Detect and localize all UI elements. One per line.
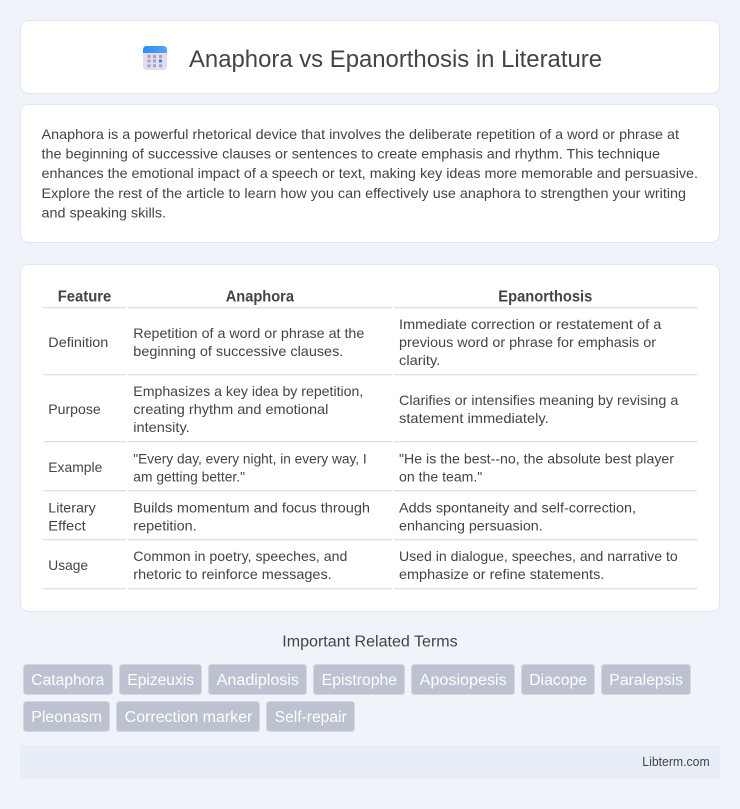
tag: Epistrophe [314, 664, 404, 694]
icon: calendar [143, 46, 167, 70]
heading: related terms: Important Related Terms [282, 634, 458, 651]
footer credit: Libterm.com [642, 755, 710, 769]
row: purpose: creating rhythm and emotional [133, 401, 328, 417]
tag: Cataphora: Cataphora [31, 672, 105, 689]
row: definition: Repetition of a word or phrase at the [133, 325, 365, 341]
tag: Diacope [522, 664, 594, 694]
tag: Aposiopesis: Aposiopesis [420, 672, 507, 689]
tag: Self-repair: Self-repair [275, 709, 347, 726]
row: purpose: Purpose [48, 401, 101, 417]
row: example: "He is the best--no, the absolute best player [399, 450, 674, 466]
table header row [58, 289, 592, 306]
tag: Diacope: Diacope [529, 672, 587, 689]
row: example: Example [48, 459, 103, 475]
tag: Epizeuxis [120, 664, 202, 694]
intro text: Anaphora is a powerful rhetorical device that involves the deliberate repetition of a word or phrase at [42, 126, 679, 142]
intro text [42, 126, 698, 220]
tag: Epizeuxis: Epizeuxis [127, 672, 194, 689]
row: literary effect: enhancing persuasion. [399, 517, 543, 533]
row: example: "Every day, every night, in every way, I [133, 450, 367, 466]
table header row: Anaphora [226, 289, 294, 306]
row: purpose: Emphasizes a key idea by repetition, [133, 383, 363, 399]
row: definition: Immediate correction or restatement of a [399, 316, 662, 332]
title: Anaphora vs Epanorthosis in Literature [189, 46, 602, 73]
table header row: Feature [58, 289, 112, 306]
tag: Aposiopesis [412, 664, 514, 694]
row: purpose: Clarifies or intensifies meaning by revising a [399, 392, 679, 408]
row: literary effect: Effect [48, 517, 86, 533]
row: literary effect: Adds spontaneity and self-correction, [399, 499, 636, 515]
row: definition [48, 316, 662, 368]
tag: Epistrophe: Epistrophe [322, 672, 397, 689]
row: definition: Definition [48, 334, 108, 350]
row: literary effect: Builds momentum and focus through [133, 499, 370, 515]
intro text: the beginning of successive clauses or sentences to create emphasis and rhythm. This technique [42, 146, 660, 162]
row: example: on the team." [399, 468, 482, 484]
intro text: and speaking skills. [42, 204, 166, 220]
intro text: enhances the emotional impact of a speech or text, making key ideas more memorable and persuasive. [42, 165, 698, 181]
row: usage: rhetoric to reinforce messages. [133, 566, 332, 582]
footer [20, 745, 720, 779]
row: purpose [48, 383, 679, 435]
row: literary effect [48, 499, 636, 533]
panel: header [20, 20, 720, 94]
tag: Anadiplosis: Anadiplosis [217, 672, 299, 689]
row: literary effect: repetition. [133, 517, 197, 533]
panel: introduction [20, 104, 720, 242]
row: definition: previous word or phrase for emphasis or [399, 334, 656, 350]
row: usage: Used in dialogue, speeches, and narrative to [399, 548, 678, 564]
row: example [48, 450, 674, 484]
panel: comparison table [20, 264, 720, 612]
row: example: am getting better." [133, 468, 245, 484]
tag: Pleonasm: Pleonasm [31, 709, 102, 726]
row: usage [48, 548, 678, 582]
tag: Paralepsis: Paralepsis [609, 672, 683, 689]
tag: Self-repair [266, 702, 354, 732]
tag: Correction marker: Correction marker [125, 709, 252, 726]
tag: Paralepsis [602, 664, 690, 694]
row: usage: Usage [48, 557, 88, 573]
related term tags [24, 664, 690, 732]
tag: Cataphora [24, 664, 112, 694]
row: definition: beginning of successive clauses. [133, 343, 343, 359]
row: purpose: statement immediately. [399, 410, 549, 426]
intro text: Explore the rest of the article to learn how you can effectively use anaphora to strengthen your writing [42, 185, 686, 201]
row: purpose: intensity. [133, 419, 190, 435]
tag: Pleonasm [24, 702, 110, 732]
row: usage: emphasize or refine statements. [399, 566, 604, 582]
tag: Anadiplosis [208, 664, 306, 694]
row: definition: clarity. [399, 352, 440, 368]
row: literary effect: Literary [48, 499, 96, 515]
tag: Correction marker [116, 702, 260, 732]
row: usage: Common in poetry, speeches, and [133, 548, 347, 564]
table header row: Epanorthosis [498, 289, 592, 306]
